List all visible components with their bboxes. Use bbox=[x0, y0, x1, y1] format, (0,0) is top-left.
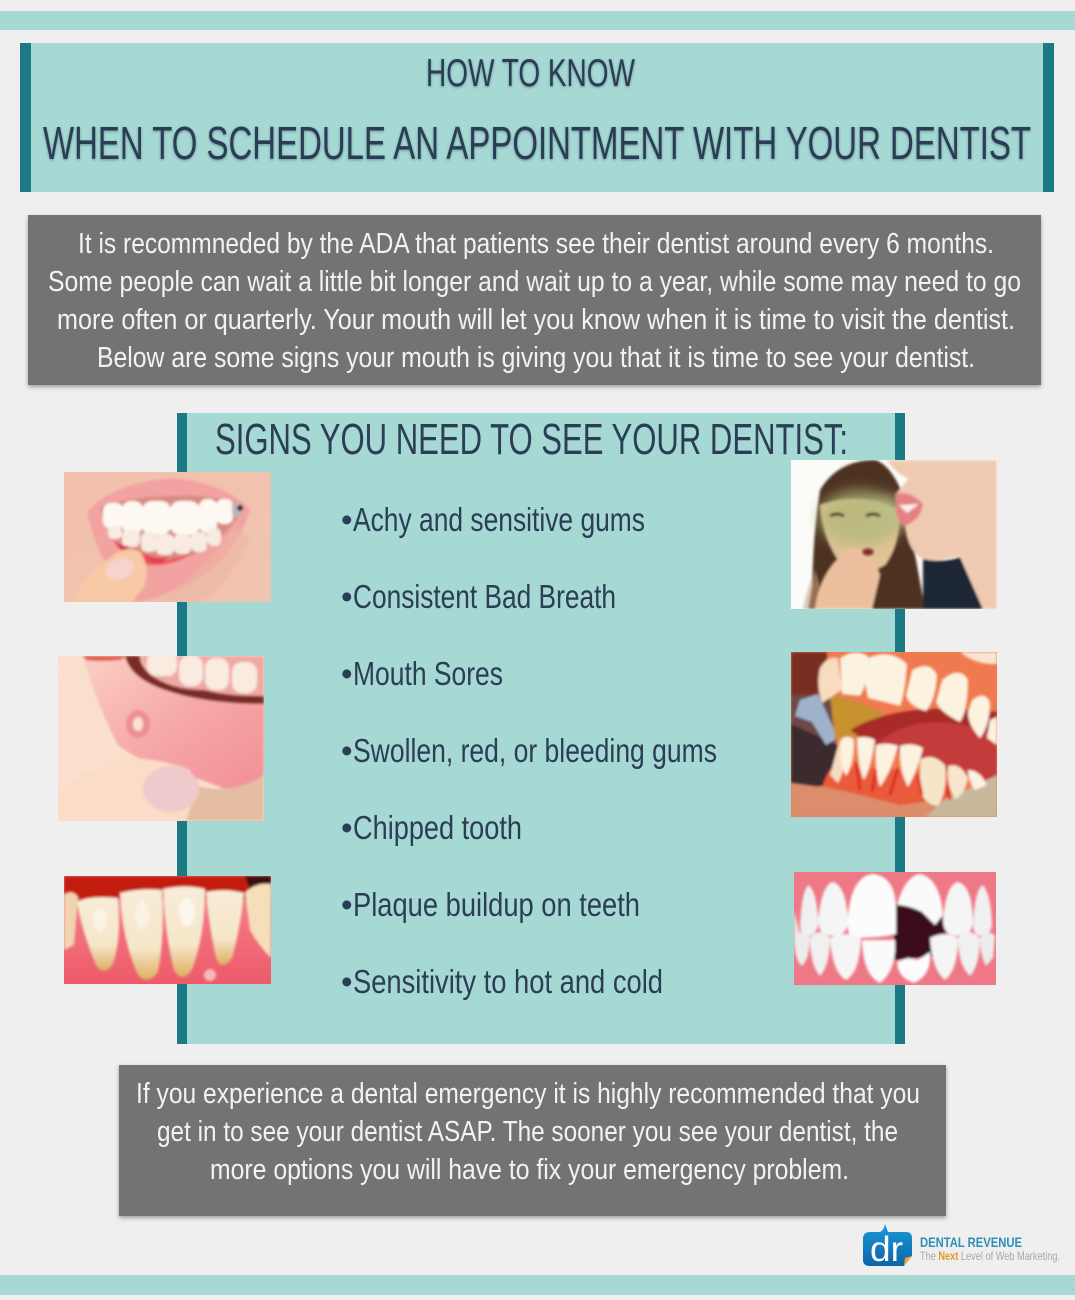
closing line 2: get in to see your dentist ASAP. The sooner you see your dentist, the bbox=[157, 1116, 898, 1148]
signs list: Mouth Sores bbox=[353, 655, 503, 692]
signs panel bbox=[177, 413, 905, 1044]
signs list: Achy and sensitive gums bbox=[353, 501, 645, 538]
heading: how to know: HOW TO KNOW bbox=[426, 52, 635, 95]
signs list: • bbox=[341, 501, 353, 538]
photo: plaque buildup bbox=[64, 876, 271, 984]
signs list: Consistent Bad Breath bbox=[353, 578, 616, 615]
signs list: • bbox=[341, 809, 353, 846]
signs list: Swollen, red, or bleeding gums bbox=[353, 732, 717, 769]
signs list: • bbox=[341, 655, 353, 692]
signs list: • bbox=[341, 886, 353, 923]
logo icon bbox=[863, 1224, 912, 1269]
signs list: Plaque buildup on teeth bbox=[353, 886, 640, 923]
logo wordmark: DENTAL REVENUE bbox=[920, 1234, 1022, 1250]
signs list: Chipped tooth bbox=[353, 809, 522, 846]
closing line 1: If you experience a dental emergency it is highly recommended that you bbox=[136, 1078, 920, 1110]
top band bbox=[0, 11, 1075, 30]
photo: mouth sore bbox=[58, 652, 264, 821]
signs list: • bbox=[341, 963, 353, 1000]
closing line 3: more options you will have to fix your emergency problem. bbox=[210, 1154, 849, 1186]
signs list: • bbox=[341, 578, 353, 615]
logo: dental revenue bbox=[863, 1224, 1060, 1269]
signs list bbox=[341, 501, 717, 1000]
bottom band bbox=[0, 1275, 1075, 1295]
photo: bleeding gums bbox=[791, 652, 997, 817]
signs list: • bbox=[341, 732, 353, 769]
photo: sensitive gums bbox=[64, 472, 271, 602]
photo: bad breath bbox=[791, 460, 997, 609]
photo: chipped tooth bbox=[794, 872, 996, 985]
signs list: Sensitivity to hot and cold bbox=[353, 963, 663, 1000]
intro text box bbox=[28, 215, 1041, 385]
header panel bbox=[20, 43, 1054, 192]
logo icon: dr bbox=[870, 1230, 903, 1269]
closing text box bbox=[119, 1065, 946, 1216]
